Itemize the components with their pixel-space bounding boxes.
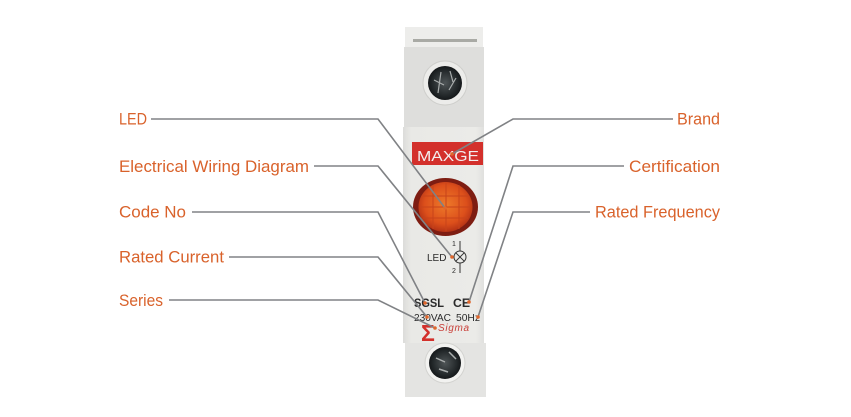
device: LED indicator module [403, 27, 486, 397]
rating text: 230VAC [414, 312, 451, 324]
wiring diagram symbol: LED [427, 253, 446, 264]
logo plate: MAXGE [412, 142, 483, 165]
label: Series: Series [119, 291, 163, 310]
label: Rated Current [119, 248, 429, 319]
icon: top terminal screw [423, 61, 467, 105]
label: Code No: Code No [119, 202, 186, 222]
label: LED [119, 110, 447, 210]
label: Brand: Brand [677, 110, 720, 128]
label: Rated Frequency [476, 202, 720, 319]
code number: SGSL: SGSL [414, 296, 444, 310]
label: Rated Current: Rated Current [119, 248, 224, 266]
label: Electrical Wiring Diagram: Electrical Wiring Diagram [119, 157, 309, 176]
label: Code No [119, 202, 427, 305]
wiring diagram symbol [427, 241, 466, 275]
device centre body [403, 127, 484, 343]
device upper body [404, 47, 484, 127]
label: Certification: Certification [629, 157, 720, 176]
rating text [414, 312, 480, 324]
series logo: Sigma [421, 320, 469, 346]
series logo: Sigma: Sigma [438, 323, 469, 334]
label: Rated Frequency: Rated Frequency [595, 202, 720, 222]
logo plate: MAXGE: MAXGE [417, 148, 479, 165]
label: Certification [467, 157, 720, 304]
wiring diagram symbol: 1 [452, 241, 456, 248]
series logo: Sigma: Σ [421, 320, 435, 346]
device lower body [405, 343, 486, 397]
label: Brand [450, 110, 720, 156]
device top cap [405, 27, 483, 48]
label: Electrical Wiring Diagram [119, 157, 454, 259]
wiring diagram symbol: 2 [452, 268, 456, 275]
label: LED: LED [119, 110, 147, 128]
icon: bottom terminal screw [425, 343, 465, 383]
rating text: 50Hz [456, 312, 480, 324]
label: Series [119, 291, 437, 330]
icon: red LED lens [413, 178, 478, 236]
icon: CE mark: CE [453, 296, 470, 310]
